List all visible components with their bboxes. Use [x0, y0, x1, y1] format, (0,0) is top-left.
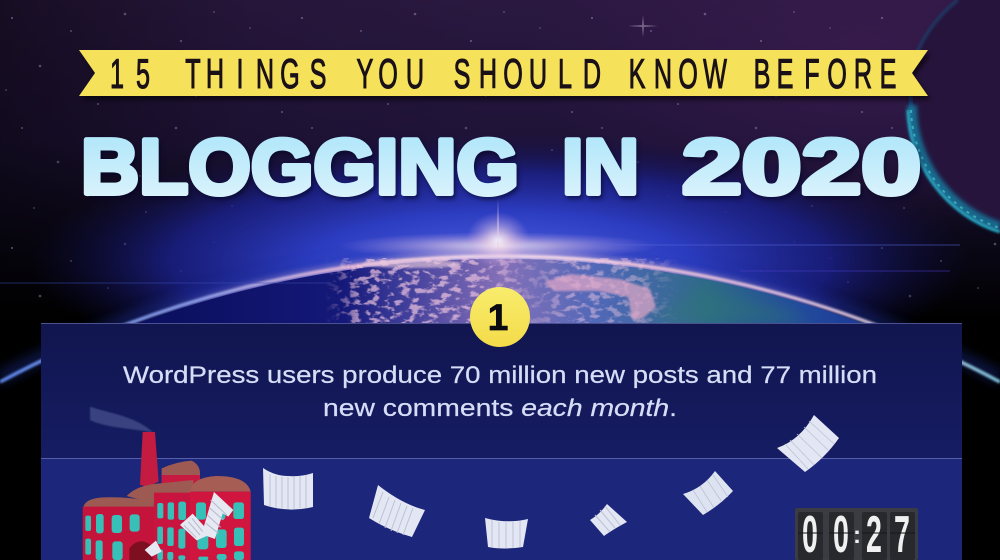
paper 6: [777, 415, 839, 472]
paper 5: [683, 471, 733, 515]
thin rim: [0, 256, 1000, 382]
side glow along limb: [0, 252, 1000, 378]
paper 3: [485, 518, 528, 548]
fact text: new comments each month .: [323, 395, 677, 422]
land mass: [545, 274, 656, 319]
chimney: [140, 432, 159, 487]
panel header: [41, 323, 962, 458]
doorway: [129, 541, 153, 560]
flip clock showing 00:27: :: [853, 522, 861, 549]
earth horizon: [0, 252, 1000, 382]
sun flare on horizon: [338, 196, 658, 268]
icon: red factory with smoke: [83, 407, 251, 560]
paper 2: [369, 485, 425, 537]
planet surface: [138, 259, 862, 323]
icon: teal-lit planet at right: [907, 0, 1000, 232]
panel: fact 1: [41, 323, 962, 560]
building: [127, 480, 193, 560]
title: blogging in 2020: 2020: [682, 122, 921, 210]
title ribbon: [79, 50, 931, 100]
rooftop: [162, 461, 200, 485]
title: blogging in 2020: [81, 122, 921, 210]
number badge: [470, 287, 530, 347]
fact text: [123, 362, 877, 422]
flip clock showing 00:27: [795, 505, 918, 560]
windows: [85, 502, 244, 560]
ribbon text: 15 THINGS YOU SHOULD KNOW BEFORE: [110, 52, 896, 98]
fact text: WordPress users produce 70 million new posts and 77 million: [123, 362, 877, 389]
title: blogging in 2020: BLOGGING: [81, 122, 519, 210]
faint horizontal light streaks: [0, 245, 960, 283]
panel body: [41, 458, 962, 560]
paper 4: [590, 504, 627, 536]
papers flying across the panel: [263, 415, 839, 548]
smoke: [90, 407, 153, 433]
title: blogging in 2020: IN: [562, 122, 639, 210]
paper 1: [263, 468, 313, 510]
cloud texture: [320, 258, 690, 323]
atmosphere glow: [150, 257, 850, 317]
paper ribbon from factory: [180, 492, 233, 540]
number badge: 1: [488, 297, 508, 338]
